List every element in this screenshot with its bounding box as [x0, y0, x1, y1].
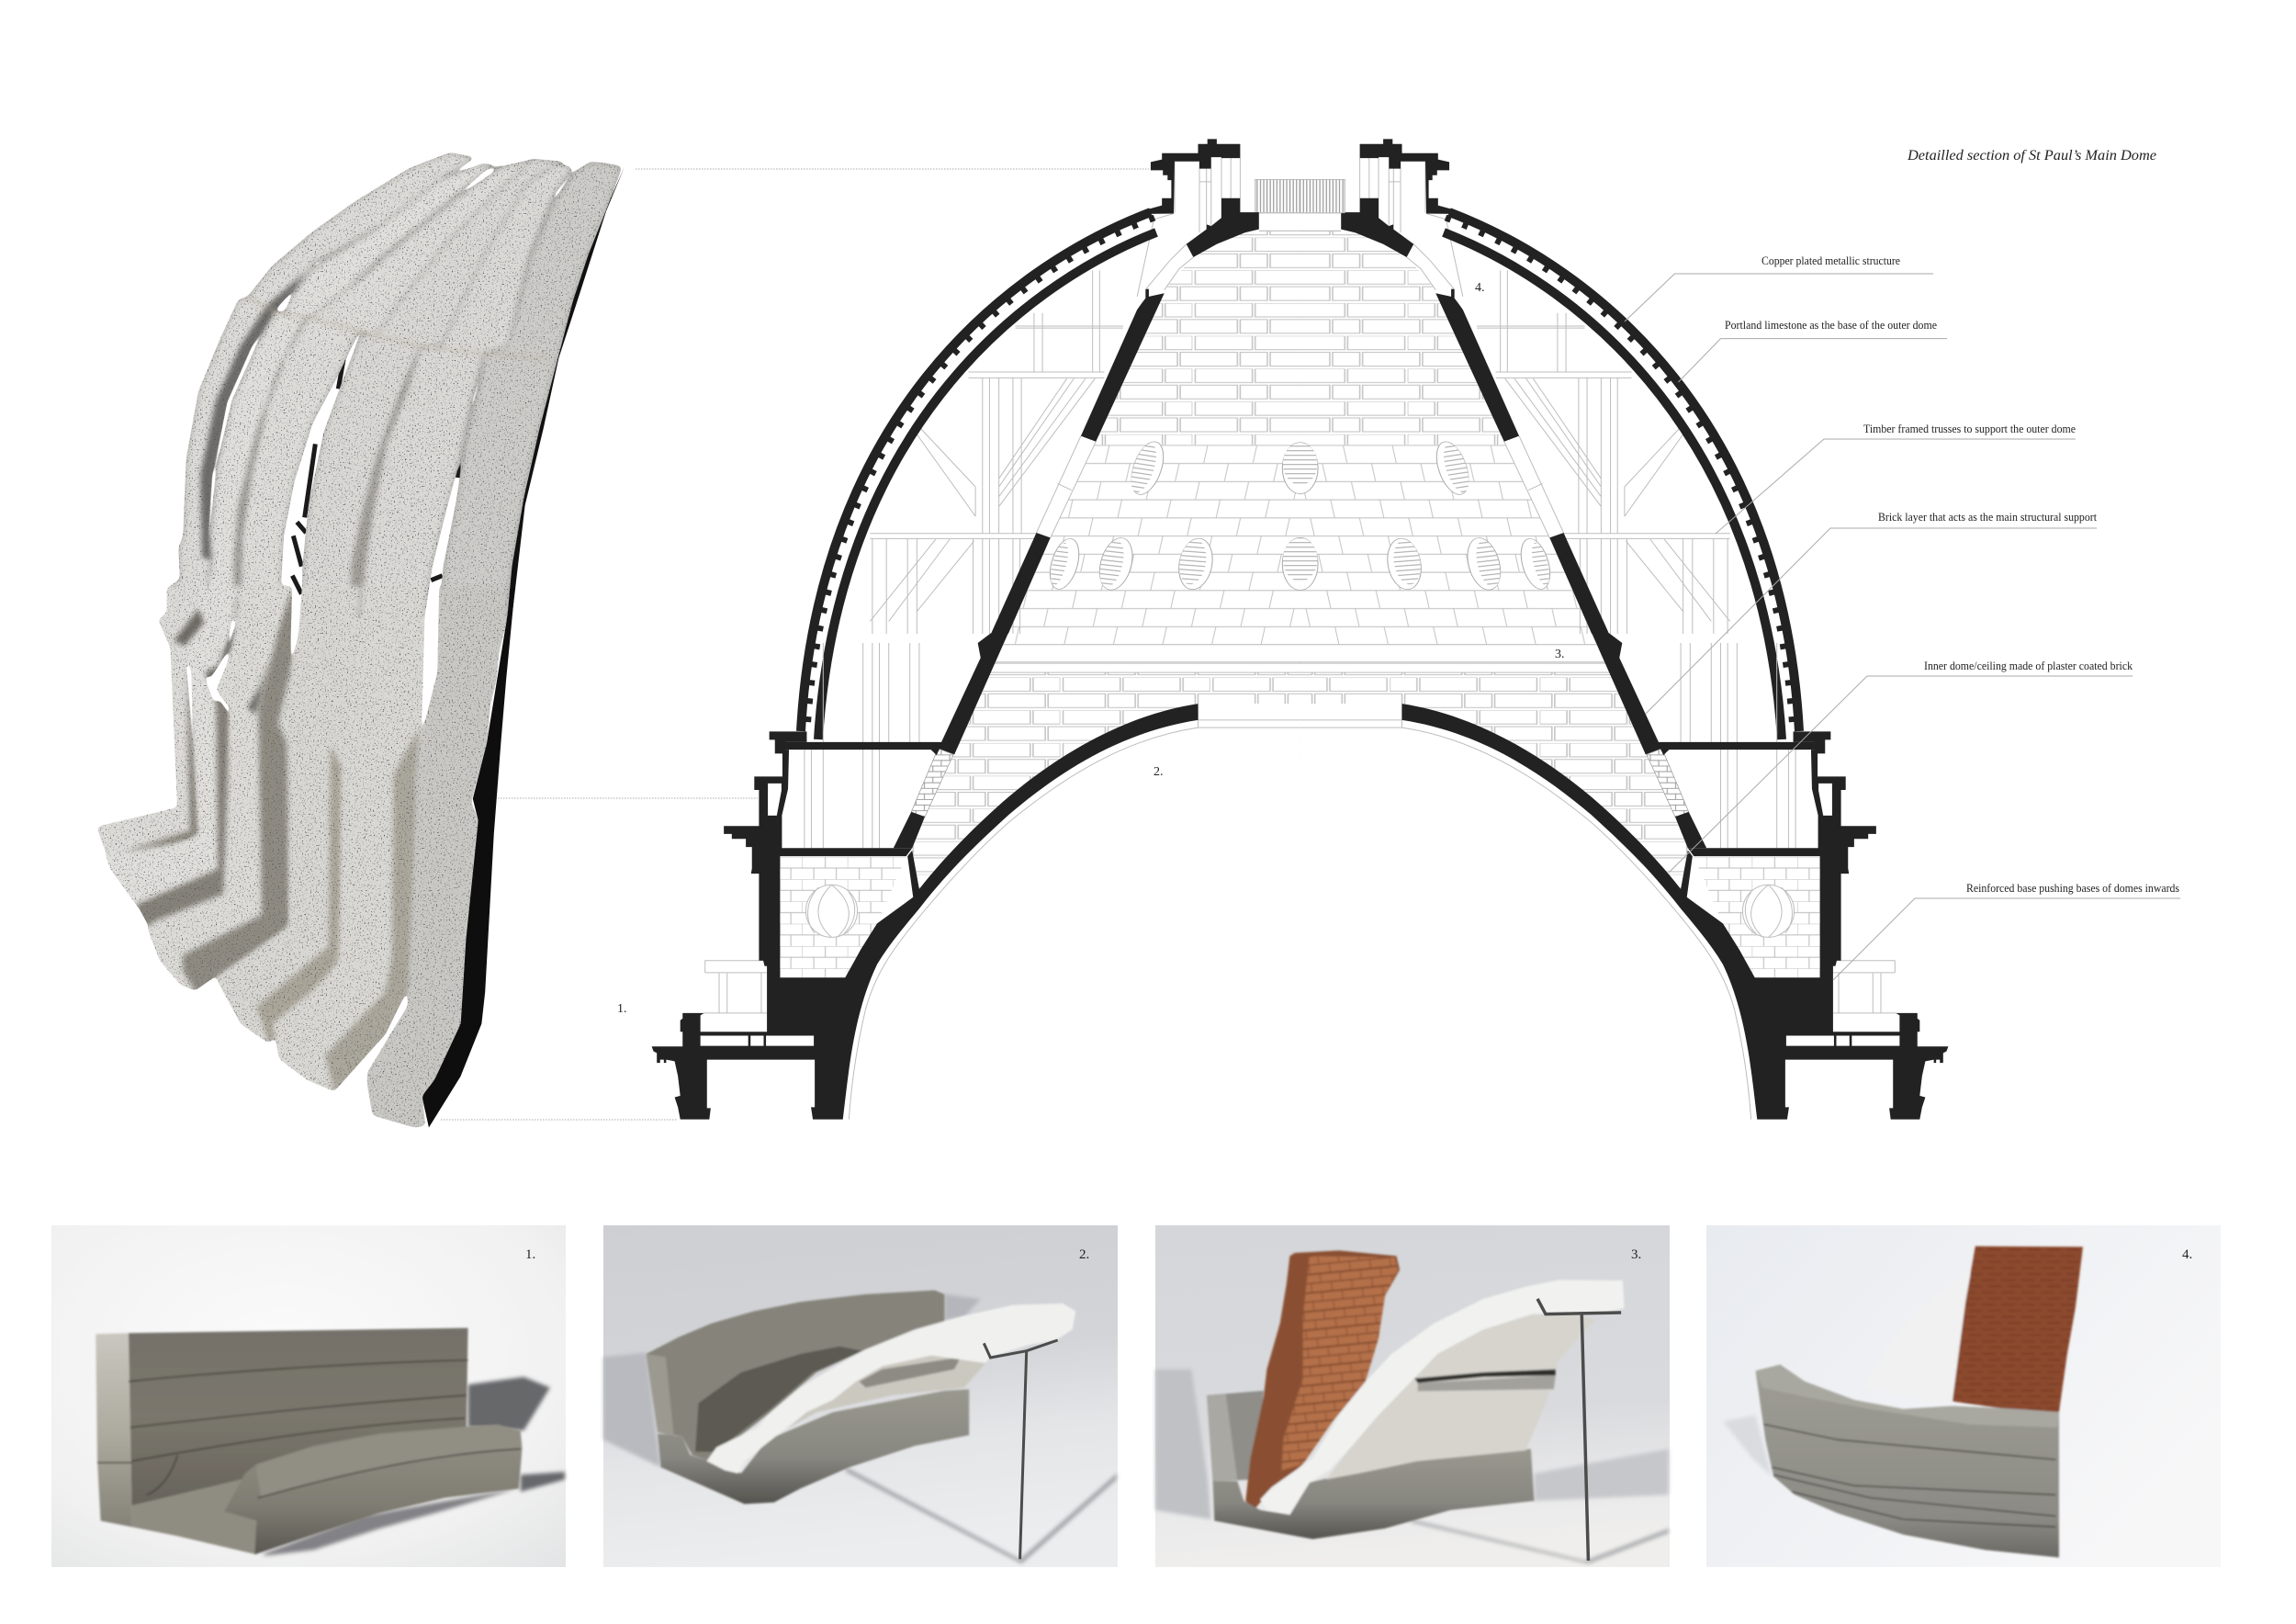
- stone ribs model photo: [96, 153, 625, 1127]
- brick face: [1953, 1246, 2083, 1412]
- rib 5 lower: [273, 586, 425, 1091]
- steel rod: [984, 1340, 1058, 1559]
- white plaster arch: [1260, 1280, 1625, 1515]
- outer dome copper layer, dashes and limestone shell: [1444, 212, 1799, 739]
- base: [658, 1389, 969, 1504]
- arch soffit: [787, 1356, 985, 1429]
- steel supports behind ribs: [292, 346, 471, 594]
- rib 4 upper: [303, 159, 563, 617]
- soffit dark streak: [1414, 1370, 1556, 1383]
- rib 4 lower: [216, 586, 360, 1043]
- rib 2 upper: [208, 164, 502, 617]
- top compression ring: [1341, 198, 1413, 257]
- lower brick field: [1300, 672, 1688, 890]
- rib 6 lower: [367, 586, 508, 1127]
- steel rod: [1537, 1299, 1621, 1561]
- front wall face: [223, 1449, 522, 1554]
- section number 2: 2.: [1154, 765, 1163, 779]
- rear wall side: [96, 1333, 131, 1527]
- rear concrete wall: [1207, 1391, 1264, 1481]
- chamber vertical lines: [1681, 643, 1795, 848]
- annotations: [617, 148, 2180, 1016]
- white plaster arch: [706, 1303, 1075, 1473]
- brick tower front: [1281, 1256, 1398, 1471]
- rib 5 upper: [361, 164, 572, 617]
- photo 3: brick layer added: [1155, 1225, 1670, 1567]
- concrete model: [96, 1328, 522, 1554]
- cracks: [1763, 1425, 2055, 1527]
- white plaster: [1863, 1271, 1970, 1406]
- upper brick cone: [1300, 231, 1505, 445]
- photo number: 4.: [2182, 1247, 2192, 1262]
- label: limestone: Portland limestone as the base of the outer dome: [1725, 319, 1937, 332]
- foundation slots: [1786, 1035, 1899, 1046]
- lantern cap: [1360, 139, 1454, 214]
- rib 2 lower: [106, 586, 239, 906]
- photo 1: concrete base: [51, 1225, 566, 1567]
- brick tower side: [1245, 1250, 1400, 1510]
- brick and plaster model: [1207, 1250, 1625, 1539]
- horizontal string course lines: [1300, 645, 1616, 672]
- rib 5 lower shade: [325, 728, 418, 1091]
- label: inner dome: Inner dome/ceiling made of plaster coated brick: [1924, 660, 2133, 672]
- shadows: [1155, 1370, 1669, 1563]
- drum window: [1818, 784, 1832, 816]
- cracks: [97, 1360, 521, 1498]
- photo number: 1.: [525, 1247, 535, 1262]
- leader lines: [1625, 274, 2180, 980]
- white void beneath inner dome: [1300, 704, 1751, 1120]
- soffit damp band: [1418, 1375, 1556, 1392]
- railing: [1833, 961, 1896, 1013]
- concrete base: [1212, 1449, 1534, 1539]
- concrete top surface: [1756, 1365, 2059, 1427]
- label: brick: Brick layer that acts as the main structural support: [1878, 511, 2097, 524]
- plaster and concrete model: [646, 1291, 1075, 1504]
- shadow: [1723, 1415, 1772, 1476]
- black shadow side upper: [505, 167, 625, 617]
- rib 3 lower shade: [183, 588, 292, 990]
- ceiling lines: [1300, 720, 1402, 727]
- mid cone band: [1549, 533, 1609, 634]
- shadows: [262, 1377, 565, 1555]
- section number 1: 1.: [617, 1002, 626, 1016]
- soffit: [1326, 1314, 1595, 1480]
- rib 2 lower shade: [137, 697, 229, 927]
- shadows: [603, 1294, 1117, 1563]
- wall end: [646, 1354, 674, 1437]
- inner dome, drum wall and foundation: [1402, 704, 1948, 1120]
- front wall cap: [256, 1425, 522, 1496]
- brick and concrete model: [1756, 1246, 2083, 1558]
- hatched brick panel: [1647, 749, 1689, 817]
- wall damp patch: [695, 1347, 862, 1452]
- label: reinforced base: Reinforced base pushing bases of domes inwards: [1966, 882, 2179, 895]
- dome section: right half: [1255, 139, 1948, 1120]
- black shadow side lower: [422, 588, 515, 1127]
- base oval opening: [1742, 885, 1795, 937]
- rib 3 upper: [241, 160, 533, 617]
- rib 1 lower shade: [111, 665, 197, 865]
- section number 4: 4.: [1475, 281, 1484, 295]
- photo 2: concrete and plaster: [603, 1225, 1118, 1567]
- upper cone band: [1435, 289, 1519, 442]
- photo number: 2.: [1079, 1247, 1089, 1262]
- rib 6 upper: [439, 163, 622, 617]
- label: copper: Copper plated metallic structure: [1761, 254, 1900, 267]
- shading strips between ribs: [234, 324, 420, 617]
- rib 1 lower: [96, 586, 206, 865]
- section number 3: 3.: [1555, 648, 1565, 661]
- heading: Detailled section of St Paul’s Main Dome: [1907, 148, 2156, 164]
- rib 4 lower shade: [256, 746, 341, 1043]
- dotted reference lines from model to section: [441, 169, 1149, 1120]
- cone band foot: [1675, 812, 1706, 848]
- seam across ribs: [248, 297, 551, 359]
- plaster line of inner dome: [1402, 704, 1751, 1120]
- photo 4: back view with brick: [1706, 1225, 2221, 1567]
- dome section: mirrored left half: [652, 139, 1345, 1120]
- rear wall face: [129, 1328, 468, 1506]
- label: timber: Timber framed trusses to support the outer dome: [1863, 423, 2076, 435]
- rear wall end: [1207, 1393, 1237, 1481]
- photo number: 3.: [1631, 1247, 1641, 1262]
- cone band lower part: [1592, 633, 1669, 754]
- capital shadows: [174, 609, 269, 715]
- rib 3 lower: [148, 586, 292, 990]
- wall: [646, 1291, 944, 1461]
- rib 1 upper: [170, 153, 475, 617]
- floor: [131, 1480, 256, 1554]
- lantern columns lines: [1259, 157, 1463, 297]
- concrete front: [1756, 1365, 2059, 1558]
- stone courses of the brick cone: [1300, 445, 1599, 645]
- timber trusses: [1477, 270, 1730, 634]
- upper row windows: [1282, 440, 1555, 592]
- lantern opening: [1255, 179, 1300, 213]
- rib 1 dark inner face: [200, 269, 310, 560]
- soffit dark patch: [860, 1357, 961, 1388]
- floor beam: [1658, 742, 1815, 755]
- base stone infill: [1694, 857, 1820, 977]
